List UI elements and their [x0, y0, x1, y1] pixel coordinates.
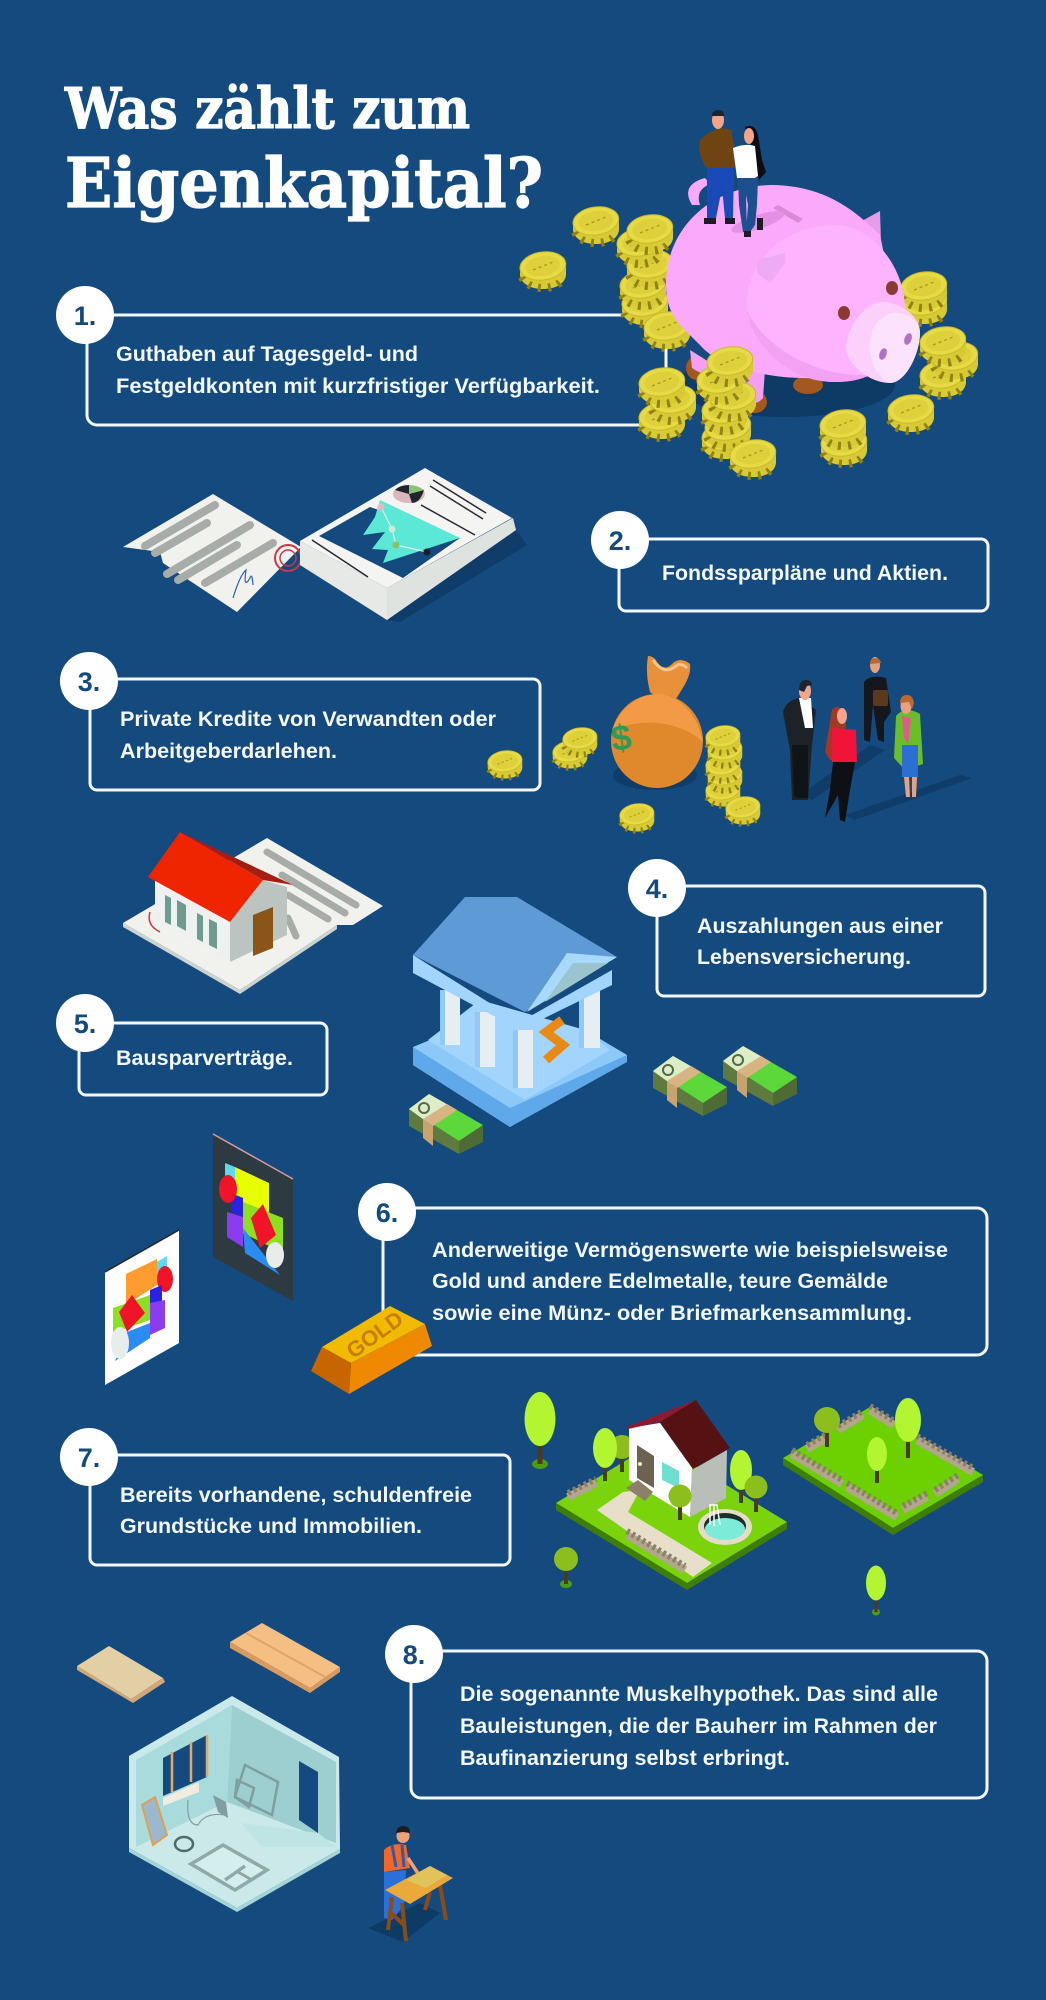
illustration: fenced green plot: [783, 1398, 983, 1535]
panel: 7: [60, 1428, 510, 1565]
panel: 4: 4.: [646, 874, 668, 904]
illustration: craftsman at workbench: [368, 1826, 453, 1942]
painting: dark frame: [213, 1134, 293, 1301]
illustration: money bag with coins: [551, 656, 761, 832]
panel: 6: Gold und andere Edelmetalle, teure Gemälde: [432, 1270, 888, 1293]
panel: 1: 1.: [74, 301, 96, 331]
title: [64, 76, 543, 224]
illustration: gold bar: GOLD: [342, 1306, 408, 1363]
trees: [593, 1428, 768, 1520]
panel: 1: Festgeldkonten mit kurzfristiger Verfügbarkeit.: [116, 375, 600, 398]
panel: 4: Auszahlungen aus einer: [697, 915, 943, 938]
panel: 4: Lebensversicherung.: [697, 946, 911, 969]
painting: white frame: [105, 1230, 179, 1385]
panel: 3: 3.: [78, 667, 100, 697]
panel: 8: [385, 1625, 987, 1798]
panel: 5: 5.: [74, 1009, 96, 1039]
illustration: money bag with coins: $: [608, 716, 634, 759]
illustration: bank building: [413, 897, 627, 1127]
illustration: gold bar: [311, 1306, 432, 1394]
panel: 5: [56, 994, 327, 1095]
illustration: house on contract: [123, 832, 383, 994]
illustration: unfinished room: [129, 1696, 340, 1912]
panel: 8: Die sogenannte Muskelhypothek. Das sind alle: [460, 1683, 938, 1706]
panel: 7: Bereits vorhandene, schuldenfreie: [120, 1484, 472, 1507]
panel: 4: [628, 859, 985, 996]
panel: 8: Bauleistungen, die der Bauherr im Rahmen der: [460, 1715, 937, 1738]
illustration: wooden boards: [77, 1623, 340, 1703]
illustration: euro banknote bundles: [409, 1046, 797, 1154]
illustration: house on green plot: [556, 1400, 787, 1590]
illustration: signed contract and fund documents: [123, 468, 527, 622]
illustration: group of people: [783, 657, 972, 822]
panel: 6: Anderweitige Vermögenswerte wie beispielsweise: [432, 1239, 948, 1262]
panel: 3: Private Kredite von Verwandten oder: [120, 708, 496, 731]
illustration: two paintings: [105, 1134, 293, 1385]
panel: 1: Guthaben auf Tagesgeld- und: [116, 343, 418, 366]
panel: 6: sowie eine Münz- oder Briefmarkensammlung.: [432, 1302, 912, 1325]
panel: 7: 7.: [78, 1443, 100, 1473]
illustration: standalone trees: [524, 1392, 886, 1616]
illustration: piggy bank with coins: [518, 110, 980, 477]
panel: 5: Bausparverträge.: [116, 1047, 293, 1070]
icon: coin in panel 3: [486, 748, 523, 778]
panel: 7: Grundstücke und Immobilien.: [120, 1515, 422, 1538]
panel: 2: Fondssparpläne und Aktien.: [662, 562, 948, 585]
title: Eigenkapital?: [65, 144, 543, 224]
panel: 2: [591, 511, 988, 611]
panel: 1: [56, 286, 666, 425]
panel: 2: 2.: [609, 526, 631, 556]
couple on piggy bank: [699, 110, 766, 237]
panel: 3: [60, 652, 540, 790]
panel: 8: Baufinanzierung selbst erbringt.: [460, 1747, 790, 1770]
panel: 8: 8.: [403, 1640, 425, 1670]
panel: 3: Arbeitgeberdarlehen.: [120, 740, 337, 763]
panel: 6: 6.: [376, 1198, 398, 1228]
panel: 6: [358, 1183, 987, 1355]
title: Was zählt zum: [64, 76, 470, 142]
